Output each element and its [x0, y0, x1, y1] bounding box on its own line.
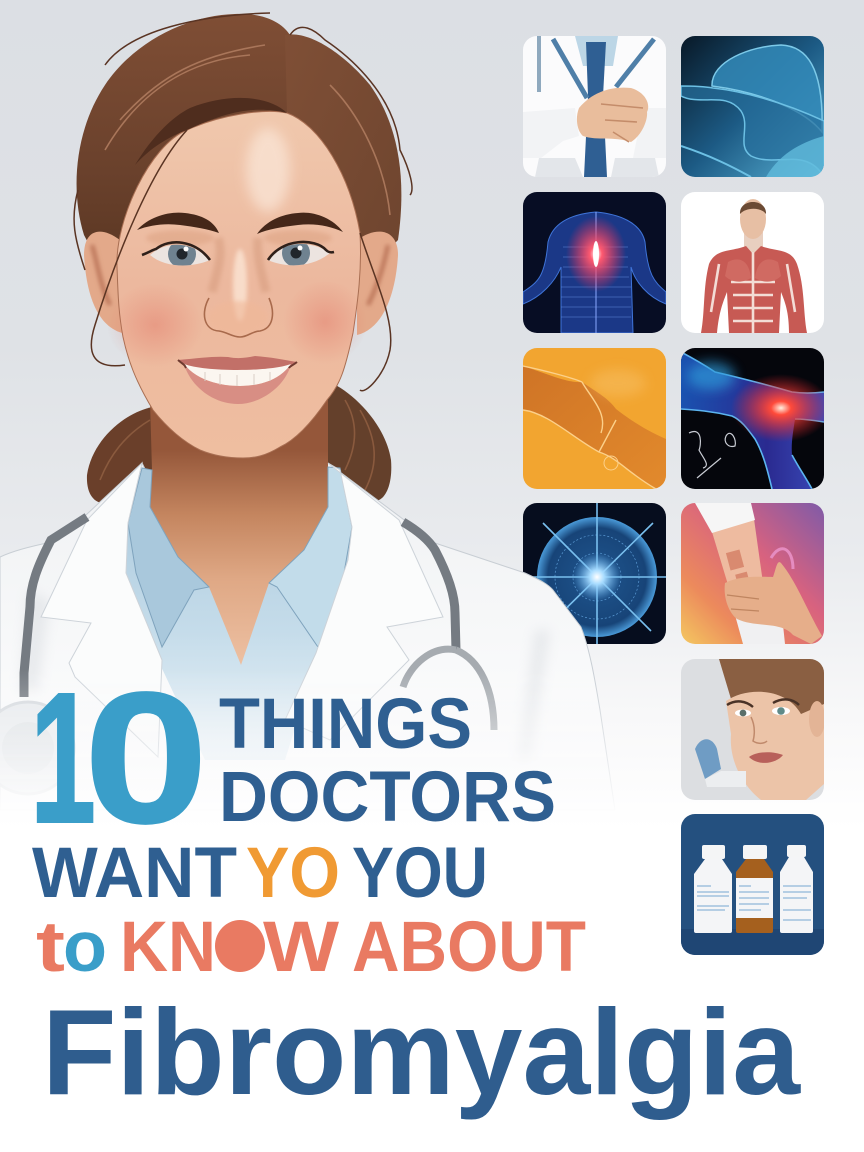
stethoscope	[0, 517, 494, 794]
heading: to know about: o	[63, 908, 107, 987]
thumbnail: orange glowing forearm	[523, 348, 666, 489]
neck	[150, 400, 328, 665]
thumbnail: blue abstract waves	[681, 36, 824, 177]
thumbnail: woman's face with blue cloth	[681, 659, 825, 800]
thumbnail: blue starburst sphere	[523, 503, 666, 644]
white coat	[0, 463, 615, 810]
heading: to know about	[36, 908, 586, 987]
hair	[77, 14, 401, 300]
coat lapels	[41, 463, 443, 757]
nose	[204, 298, 272, 337]
number 10	[30, 655, 208, 862]
eyes	[142, 240, 334, 266]
heading: to know about: KN	[120, 908, 216, 987]
heading: things doctors: DOCTORS	[219, 758, 556, 837]
heading: want yo you: YO	[246, 834, 340, 913]
smile	[178, 356, 297, 404]
thumbnail: glowing blue back with spine pain	[523, 192, 666, 333]
heading: want yo you: YOU	[352, 834, 488, 913]
ears	[84, 232, 398, 335]
thumbnail: tube held by hand	[681, 503, 824, 644]
heading: to know about: W	[263, 908, 339, 987]
thumbnail: doctor with hands on chest	[523, 36, 666, 177]
heading: things doctors	[219, 685, 556, 837]
heading: to know about: ABOUT	[352, 908, 586, 987]
number 10: 0	[84, 655, 208, 862]
thumbnail: three medicine bottles	[681, 814, 824, 955]
thumbnail: blue limb with red joint pain	[681, 348, 831, 489]
heading: things doctors: THINGS	[219, 685, 472, 764]
front hair strands	[74, 13, 412, 391]
eyebrows	[137, 213, 343, 234]
blue shirt	[126, 528, 350, 760]
doctor portrait	[0, 13, 615, 810]
thumbnail: muscular anatomy figure	[681, 192, 824, 333]
number 10: 1	[30, 655, 96, 862]
heading: want yo you: WANT	[32, 834, 237, 913]
shirt collar	[128, 467, 352, 650]
heading: fibromyalgia: Fibromyalgia	[42, 984, 801, 1120]
heading: want yo you	[32, 834, 488, 913]
title	[30, 655, 801, 1120]
face	[107, 111, 367, 458]
coat folds	[28, 595, 548, 726]
ponytail	[87, 380, 391, 503]
panel: image grid	[523, 36, 831, 955]
heading: to know about: t	[36, 908, 65, 987]
